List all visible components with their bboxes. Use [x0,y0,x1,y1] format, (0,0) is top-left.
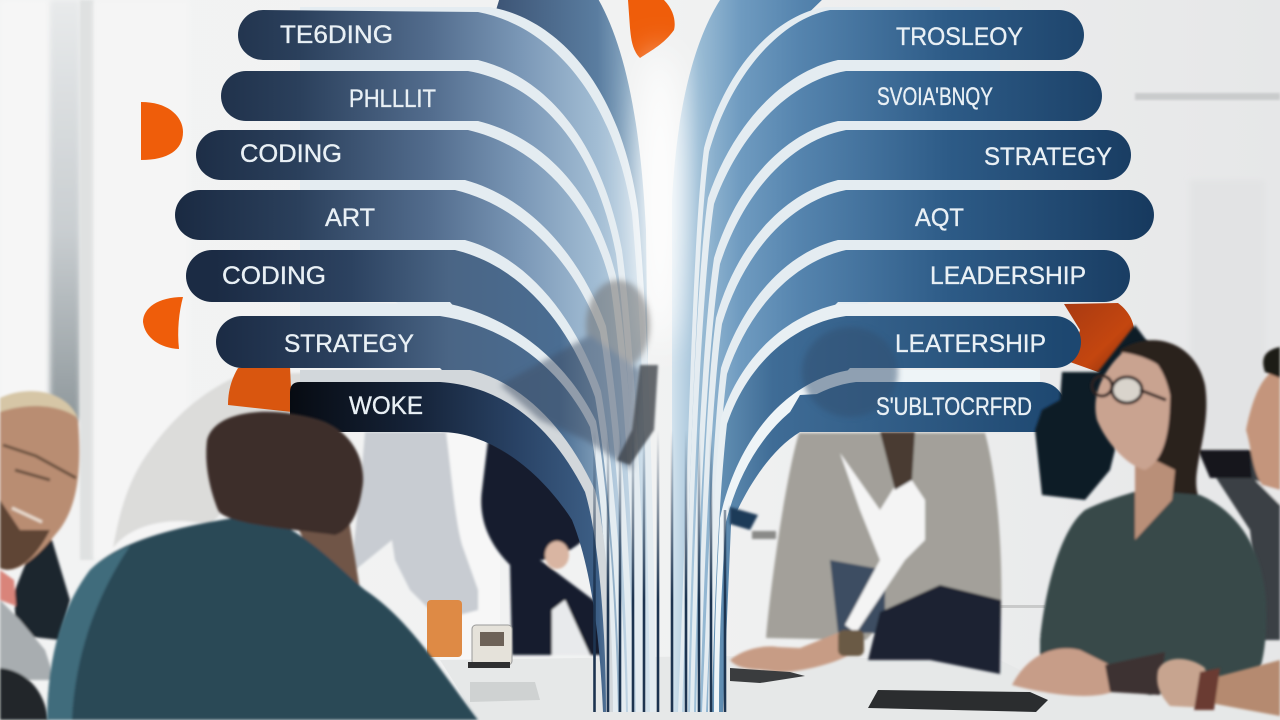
jacket highlight [47,546,130,720]
figure's dark object [617,365,658,465]
right man at edge [1198,347,1280,640]
left labels [222,21,436,420]
orange shape top centre [628,0,675,58]
face [1095,349,1170,470]
ribbon L2 [221,60,646,712]
hair [1120,340,1206,495]
hand [1157,659,1210,708]
pink collar [0,570,16,606]
seated woman with glasses [1012,340,1266,696]
left labels: TE6DING [280,21,393,49]
person: hand by suit [545,541,569,569]
lower chair [0,668,48,720]
ribbon R2 [684,60,1102,712]
person: dark suit [481,440,622,655]
dark segment on right ribbon [730,507,758,530]
mouth [12,508,42,522]
right labels: LEADERSHIP [930,262,1086,290]
person: woman in grey cardigan [730,432,1001,674]
left seated man [0,391,79,720]
head hair [206,412,363,535]
glasses [3,445,76,480]
right labels: S'UBLTOCRFRD [876,393,1032,421]
orange shape left upper [141,102,183,160]
decorative orange shapes [141,0,1134,412]
glass [468,625,512,668]
right labels [876,23,1112,421]
ribbon R4 [696,180,1154,712]
ribbon R5 [702,240,1130,712]
ribbon L4 [175,180,634,712]
ribbon R1 [678,7,1084,712]
ribbon L1 [238,7,656,712]
arm [1205,660,1280,716]
left labels: PHLLLIT [349,85,436,113]
left labels: CODING [240,140,342,168]
vertical stems [594,430,725,712]
bracelets [1194,668,1220,710]
right ribbons [672,0,1154,712]
glasses [1092,376,1166,403]
ribbon L3 [196,121,642,712]
dark chair and jacket [1198,450,1280,640]
hair fringe [1120,345,1180,385]
ribbon R0 [672,0,825,712]
right labels: TROSLEOY [896,23,1023,51]
collar [1255,480,1280,505]
background people [113,372,1001,674]
person: white panel beside suit [552,600,590,655]
items on the table [427,600,1048,712]
ribbon L5 [186,240,626,712]
neck [1135,450,1175,540]
ribbon L6 [216,302,618,712]
table [440,656,1280,720]
ribbon L0 [490,0,652,712]
right labels: AQT [915,204,964,232]
small tablet under hands [730,668,805,683]
beard [0,500,50,570]
right labels: STRATEGY [984,143,1112,171]
hanging dark jacket [1035,325,1150,500]
orange shape left lower [143,297,183,349]
ribbon R6 [708,304,1081,712]
foreground man seen from behind [47,412,478,720]
paper on table [470,682,540,702]
figure shoulders [500,335,640,470]
ribbon R3 [690,121,1131,712]
sleeve [1105,652,1165,695]
left ribbons [175,0,656,712]
person: bending man in white shirt [113,372,330,548]
neck [285,495,360,590]
figure head [586,280,650,370]
hands [1012,648,1112,696]
object: door handle [752,531,776,539]
centre glow [640,50,680,350]
blond hair [0,391,78,418]
left labels: ART [325,204,375,232]
checked shirt [0,600,55,680]
teal jacket [47,515,478,720]
face [1246,368,1280,490]
right labels: SVOIA'BNQY [877,83,993,111]
person: centre man's light shirt [352,432,478,620]
figure on right [802,327,898,417]
right man's arm and hand [1157,659,1280,716]
face [0,393,79,570]
orange shape behind man's head [228,366,292,412]
chair back [15,540,70,640]
orange drink [427,600,462,657]
ribbon L7 [290,370,613,712]
left labels: STRATEGY [284,330,414,358]
hair [1263,347,1280,378]
left labels: WOKE [349,392,423,420]
tablet on table [868,690,1048,712]
right labels: LEATERSHIP [895,330,1046,358]
orange shape right [1064,303,1134,372]
translucent figure over ribbons [500,280,898,470]
left labels: CODING [222,262,326,290]
jacket [1040,490,1266,695]
ribbon R7 [714,370,1065,712]
